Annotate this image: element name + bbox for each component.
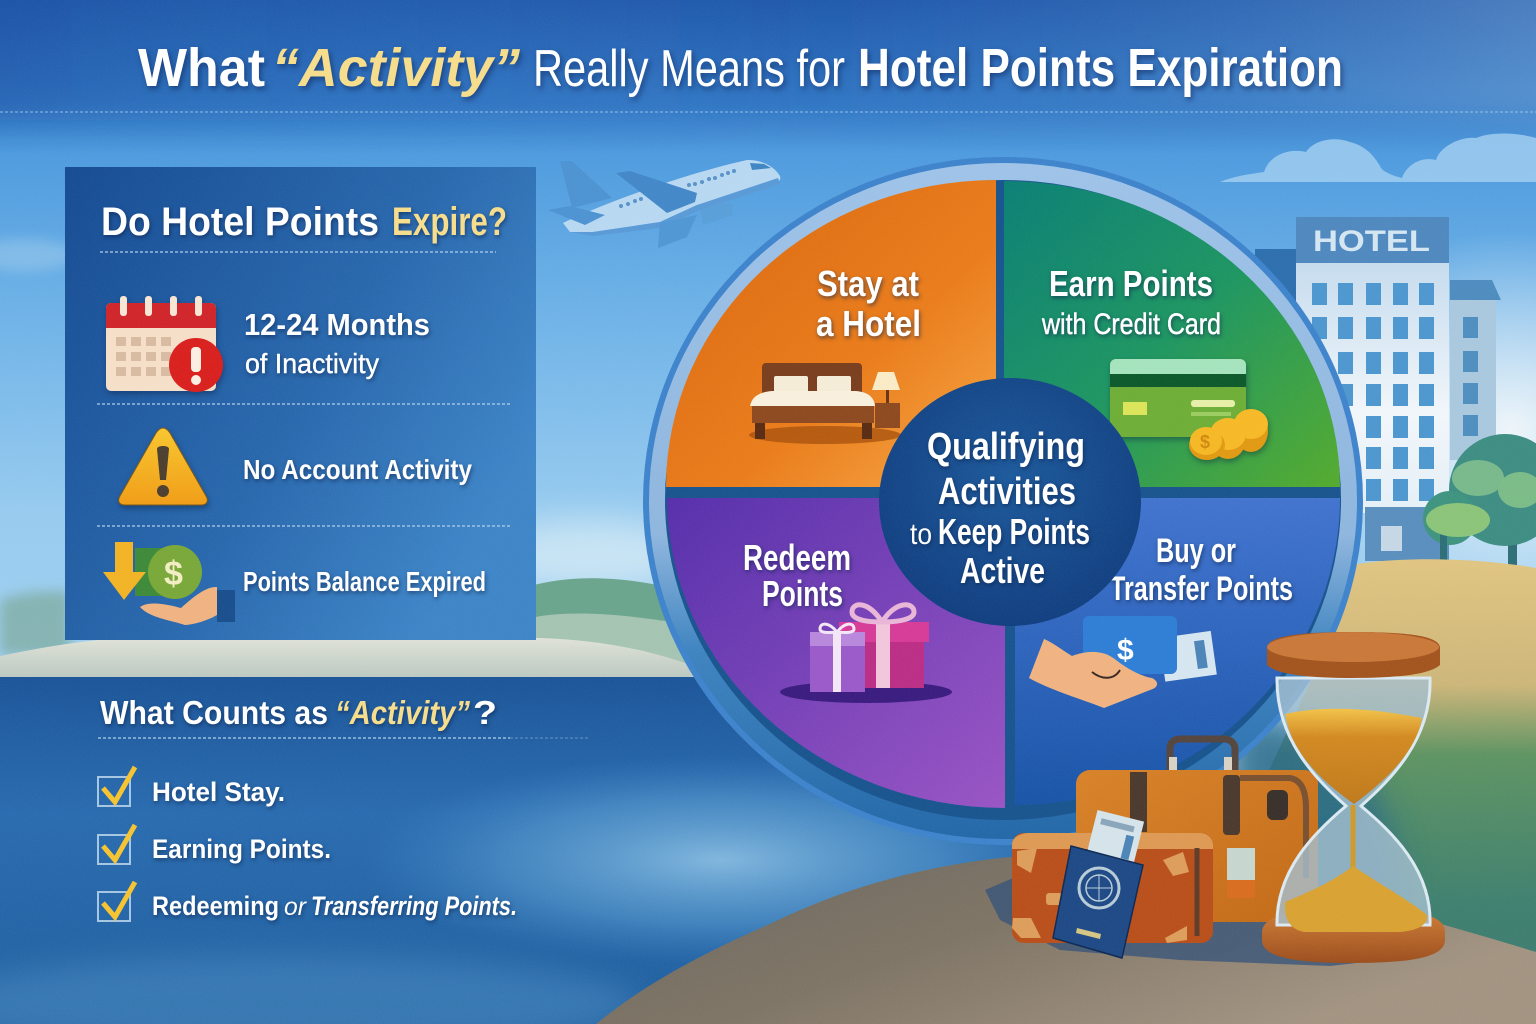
sea: [0, 676, 1120, 1024]
hotel sign: [1296, 217, 1449, 263]
label: stay at a hotel: [816, 263, 921, 344]
item: redeeming or transferring points: Redeeming: [152, 891, 279, 921]
center label: [910, 426, 1090, 591]
text: no account activity: No Account Activity: [243, 454, 472, 485]
label: earn points: [1041, 263, 1221, 341]
airplane: [548, 160, 780, 248]
text: 12-24 months of inactivity: of Inactivity: [245, 348, 379, 379]
wedge: redeem points: [667, 498, 1005, 808]
hourglass: [1262, 632, 1445, 963]
panel heading: Expire?: [392, 200, 507, 244]
pie chart: qualifying activities: [643, 157, 1363, 845]
center circle: [879, 378, 1141, 626]
boarding pass: [1086, 810, 1144, 868]
foreground ground path: [596, 856, 1536, 1024]
text: points balance expired: Points Balance Expired: [243, 566, 486, 597]
icon: bed: [749, 363, 901, 444]
top cap: [1267, 632, 1440, 678]
center label: to: [910, 518, 932, 551]
icon: hand with card and ticket: $: [1117, 634, 1134, 667]
distant hills left and right of panel: [0, 578, 720, 680]
item: hotel stay: Hotel Stay.: [152, 777, 285, 807]
center label: Keep Points: [938, 511, 1090, 552]
heading: what counts as activity: ?: [473, 694, 497, 731]
title: What: [138, 38, 265, 98]
base plate: [1262, 913, 1445, 963]
item: hotel stay: [98, 767, 285, 807]
shadow under luggage: [985, 858, 1400, 966]
sandy shore left: [0, 638, 720, 677]
icon: hand with card and ticket: [1029, 616, 1217, 708]
center label: Active: [960, 550, 1045, 591]
text: 12-24 months of inactivity: [244, 307, 430, 379]
panel: do hotel points expire: [65, 167, 536, 640]
clouds: [1220, 134, 1536, 182]
passport: [1053, 846, 1143, 958]
icon: warning triangle: [119, 428, 207, 505]
label: redeem points: Redeem: [743, 537, 851, 578]
large suitcase: [1076, 739, 1318, 922]
upper sand: [1285, 709, 1422, 804]
icon: money and hand with down arrow: $: [164, 555, 183, 593]
icon: money and hand with down arrow: [103, 542, 235, 625]
checklist: [98, 767, 517, 921]
label: buy or transfer points: Buy or: [1156, 532, 1236, 570]
icon: credit card and coins: $: [1200, 432, 1210, 452]
heading: what counts as activity: “Activity”: [335, 694, 470, 731]
wedge: buy or transfer points: [1015, 498, 1340, 805]
item: redeeming or transferring points: Transferring Points.: [311, 891, 517, 921]
lower sand: [1285, 866, 1427, 932]
icon: gift boxes: [780, 605, 952, 703]
icon: calendar with alert: [106, 296, 223, 392]
title: Hotel Points Expiration: [858, 38, 1343, 98]
hotel building: [1255, 217, 1501, 561]
hotel sign: HOTEL: [1313, 225, 1430, 258]
heading: what counts as activity: What Counts as: [100, 694, 328, 731]
glass bulbs: [1277, 678, 1430, 925]
title: [138, 38, 1343, 98]
icon: credit card and coins: [1110, 359, 1268, 460]
label: redeem points: Points: [762, 573, 843, 614]
panel heading: Do Hotel Points: [101, 200, 379, 244]
title: “Activity”: [272, 38, 520, 98]
right sand and green hill: [1150, 559, 1536, 1024]
outer ring: [643, 157, 1363, 845]
center label: Qualifying: [927, 426, 1085, 468]
label: earn points: Earn Points: [1049, 263, 1213, 304]
label: stay at a hotel: Stay at: [817, 263, 919, 304]
label: buy or transfer points: [1110, 532, 1293, 608]
heading: what counts as activity: [100, 694, 497, 731]
small suitcase: [1012, 833, 1213, 943]
item: earning points: Earning Points.: [152, 834, 331, 864]
label: redeem points: [743, 537, 851, 614]
trees: [1423, 434, 1536, 565]
label: earn points: with Credit Card: [1041, 308, 1221, 341]
wedge: earn points with credit card: [1004, 181, 1340, 487]
item: redeeming or transferring points: [98, 882, 517, 921]
text: 12-24 months of inactivity: 12-24 Months: [244, 307, 430, 342]
center label: Activities: [938, 471, 1076, 513]
title: Really Means for: [533, 40, 845, 98]
wedge: stay at a hotel: [666, 180, 996, 487]
item: redeeming or transferring points: or: [284, 893, 308, 921]
label: buy or transfer points: Transfer Points: [1110, 570, 1293, 608]
label: stay at a hotel: a Hotel: [816, 303, 921, 344]
hotel windows: [1312, 283, 1434, 501]
item: earning points: [98, 825, 331, 864]
